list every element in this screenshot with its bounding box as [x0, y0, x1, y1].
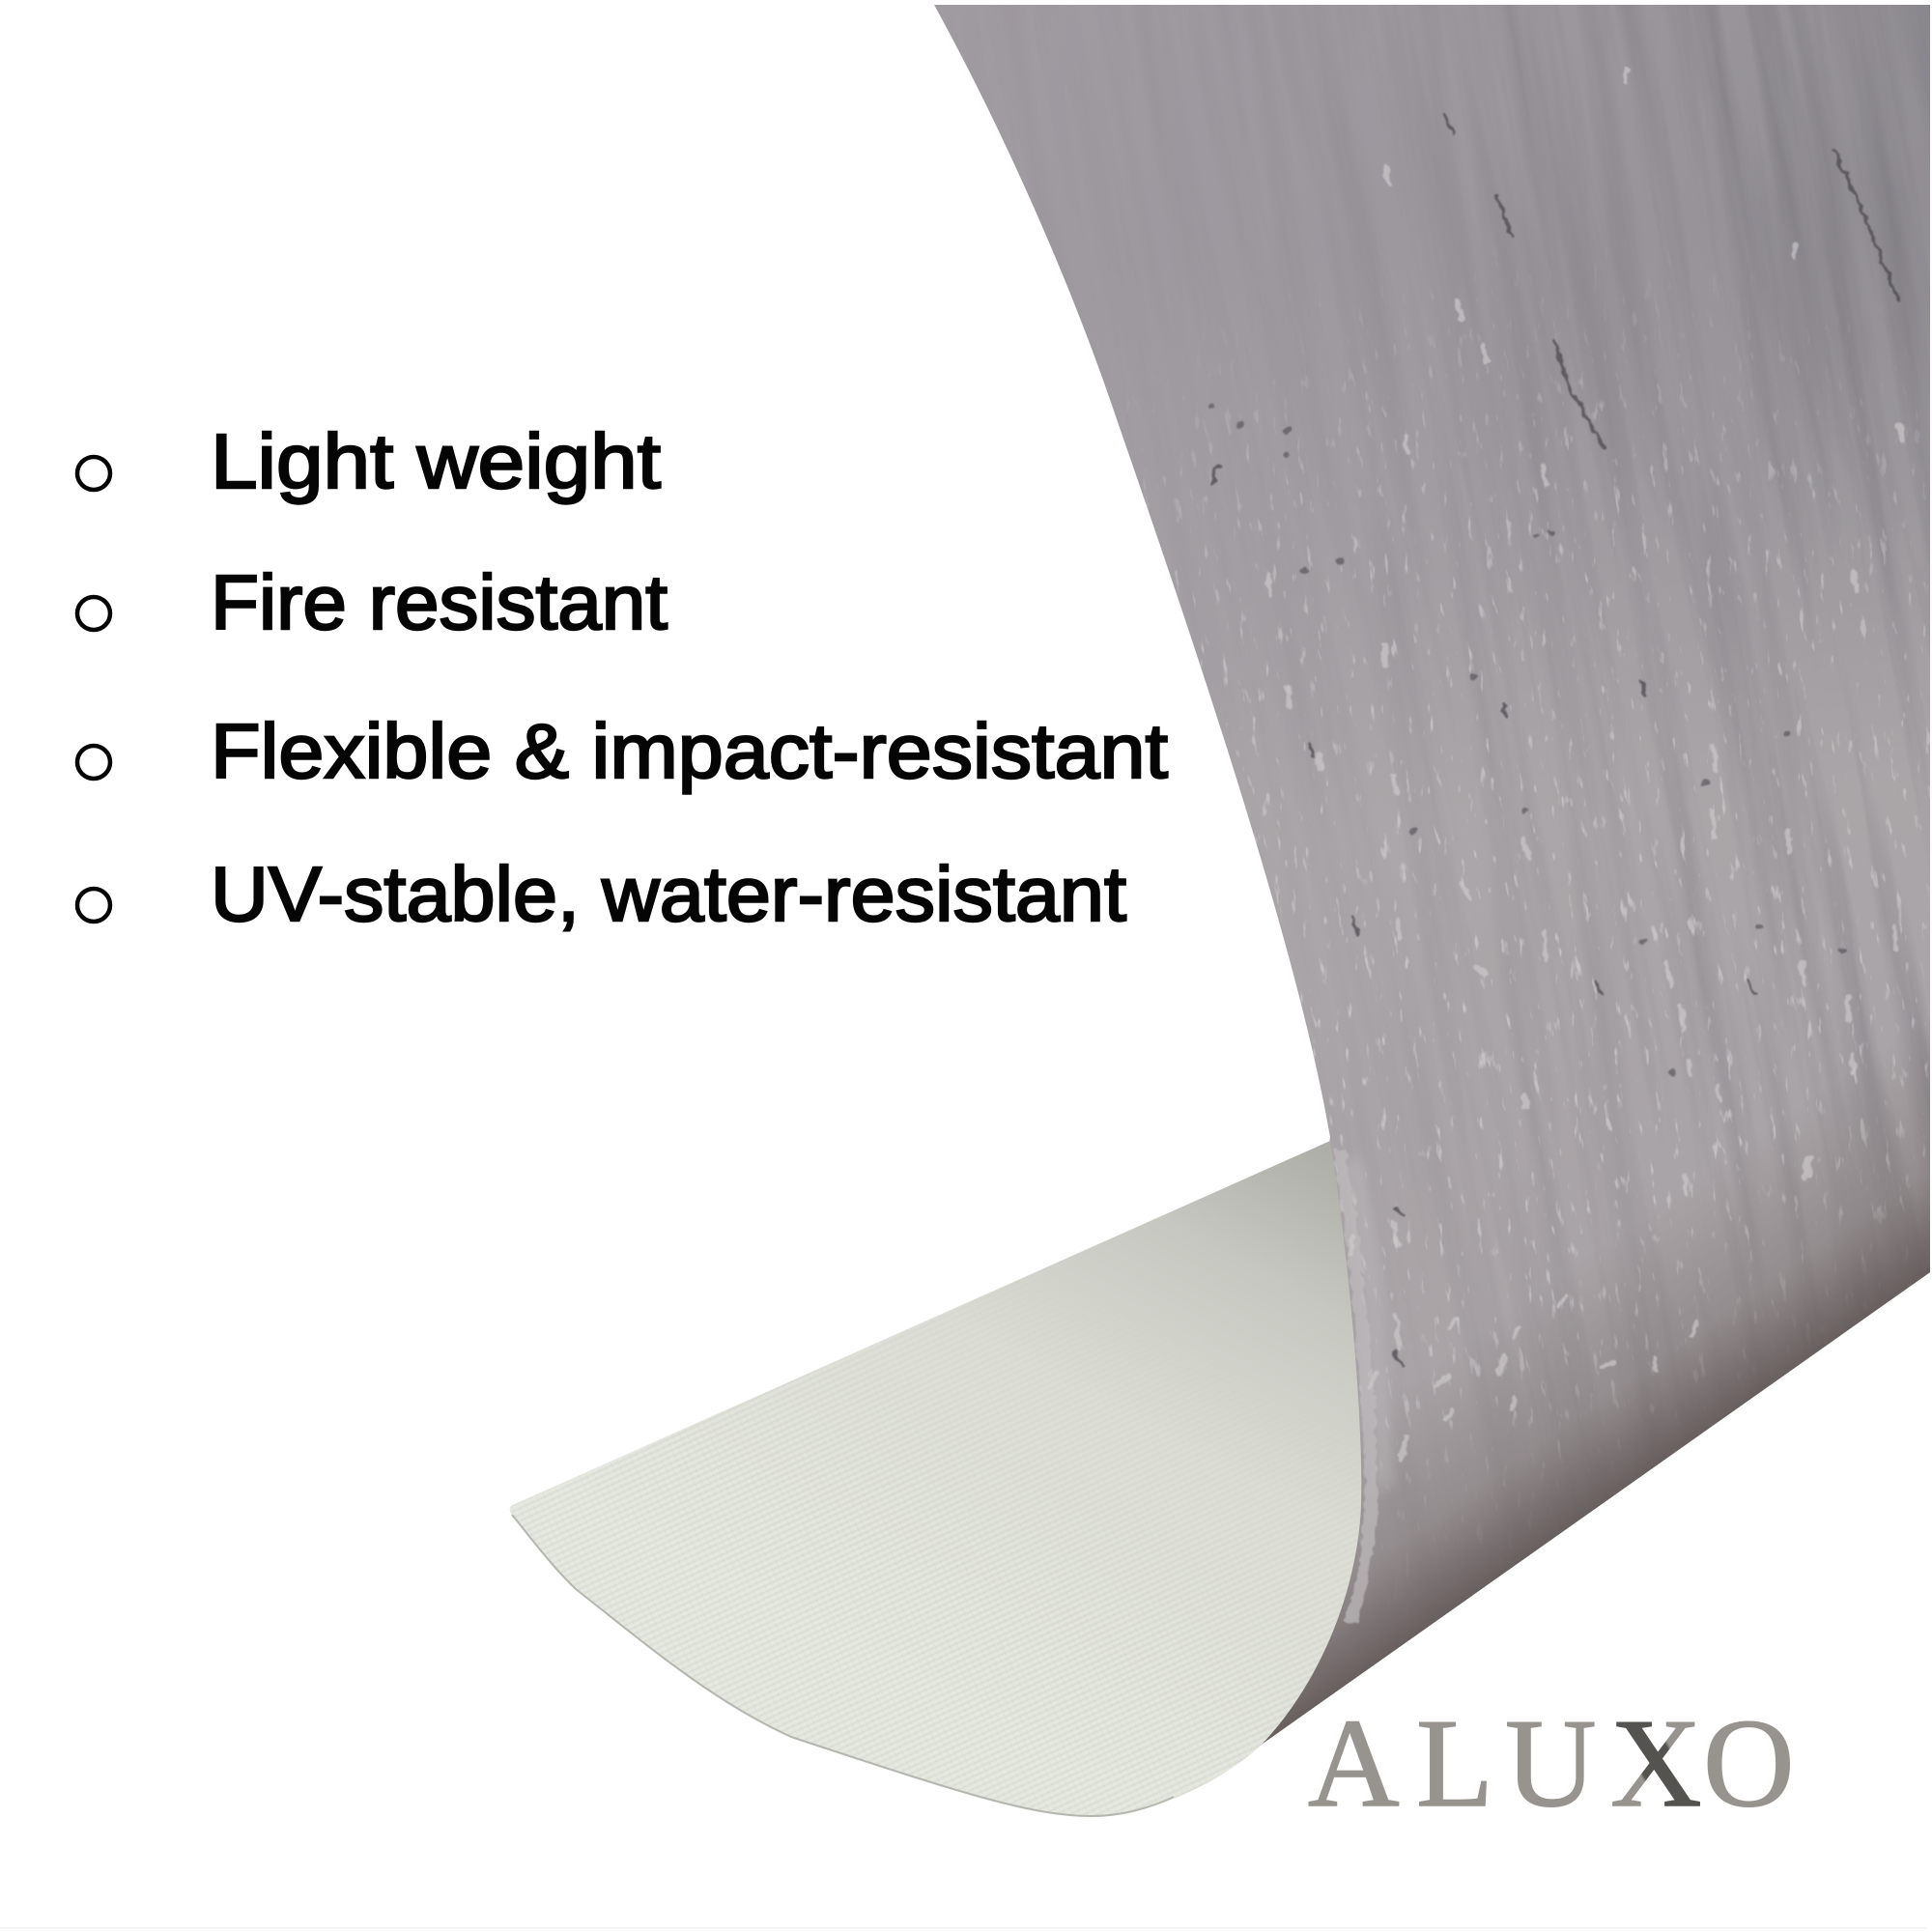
bullet icon	[77, 889, 110, 922]
bullet icon	[77, 597, 110, 630]
light flecks	[1268, 70, 1902, 1459]
feature: Light weight: Light weight	[211, 418, 661, 504]
panel: cream woven backing	[510, 1141, 1362, 1817]
feature: UV-stable, water-resistant: UV-stable, water-resistant	[211, 851, 1126, 937]
feature: Flexible and impact-resistant: Flexible & impact-resistant	[211, 708, 1168, 794]
dark cracks and pits	[1213, 116, 1899, 1368]
brand logo: ALUXO: ALUXO	[1308, 1693, 1795, 1833]
feature list	[77, 418, 1168, 937]
panel: grey stone-texture face	[918, 0, 1932, 1773]
product sheet: textured grey face and cream backing	[483, 0, 1932, 1835]
bullet icon	[77, 746, 110, 779]
bullet icon	[77, 457, 110, 490]
feature: Fire resistant: Fire resistant	[211, 559, 668, 645]
faint frame line at the lower edge	[0, 1927, 1927, 1928]
